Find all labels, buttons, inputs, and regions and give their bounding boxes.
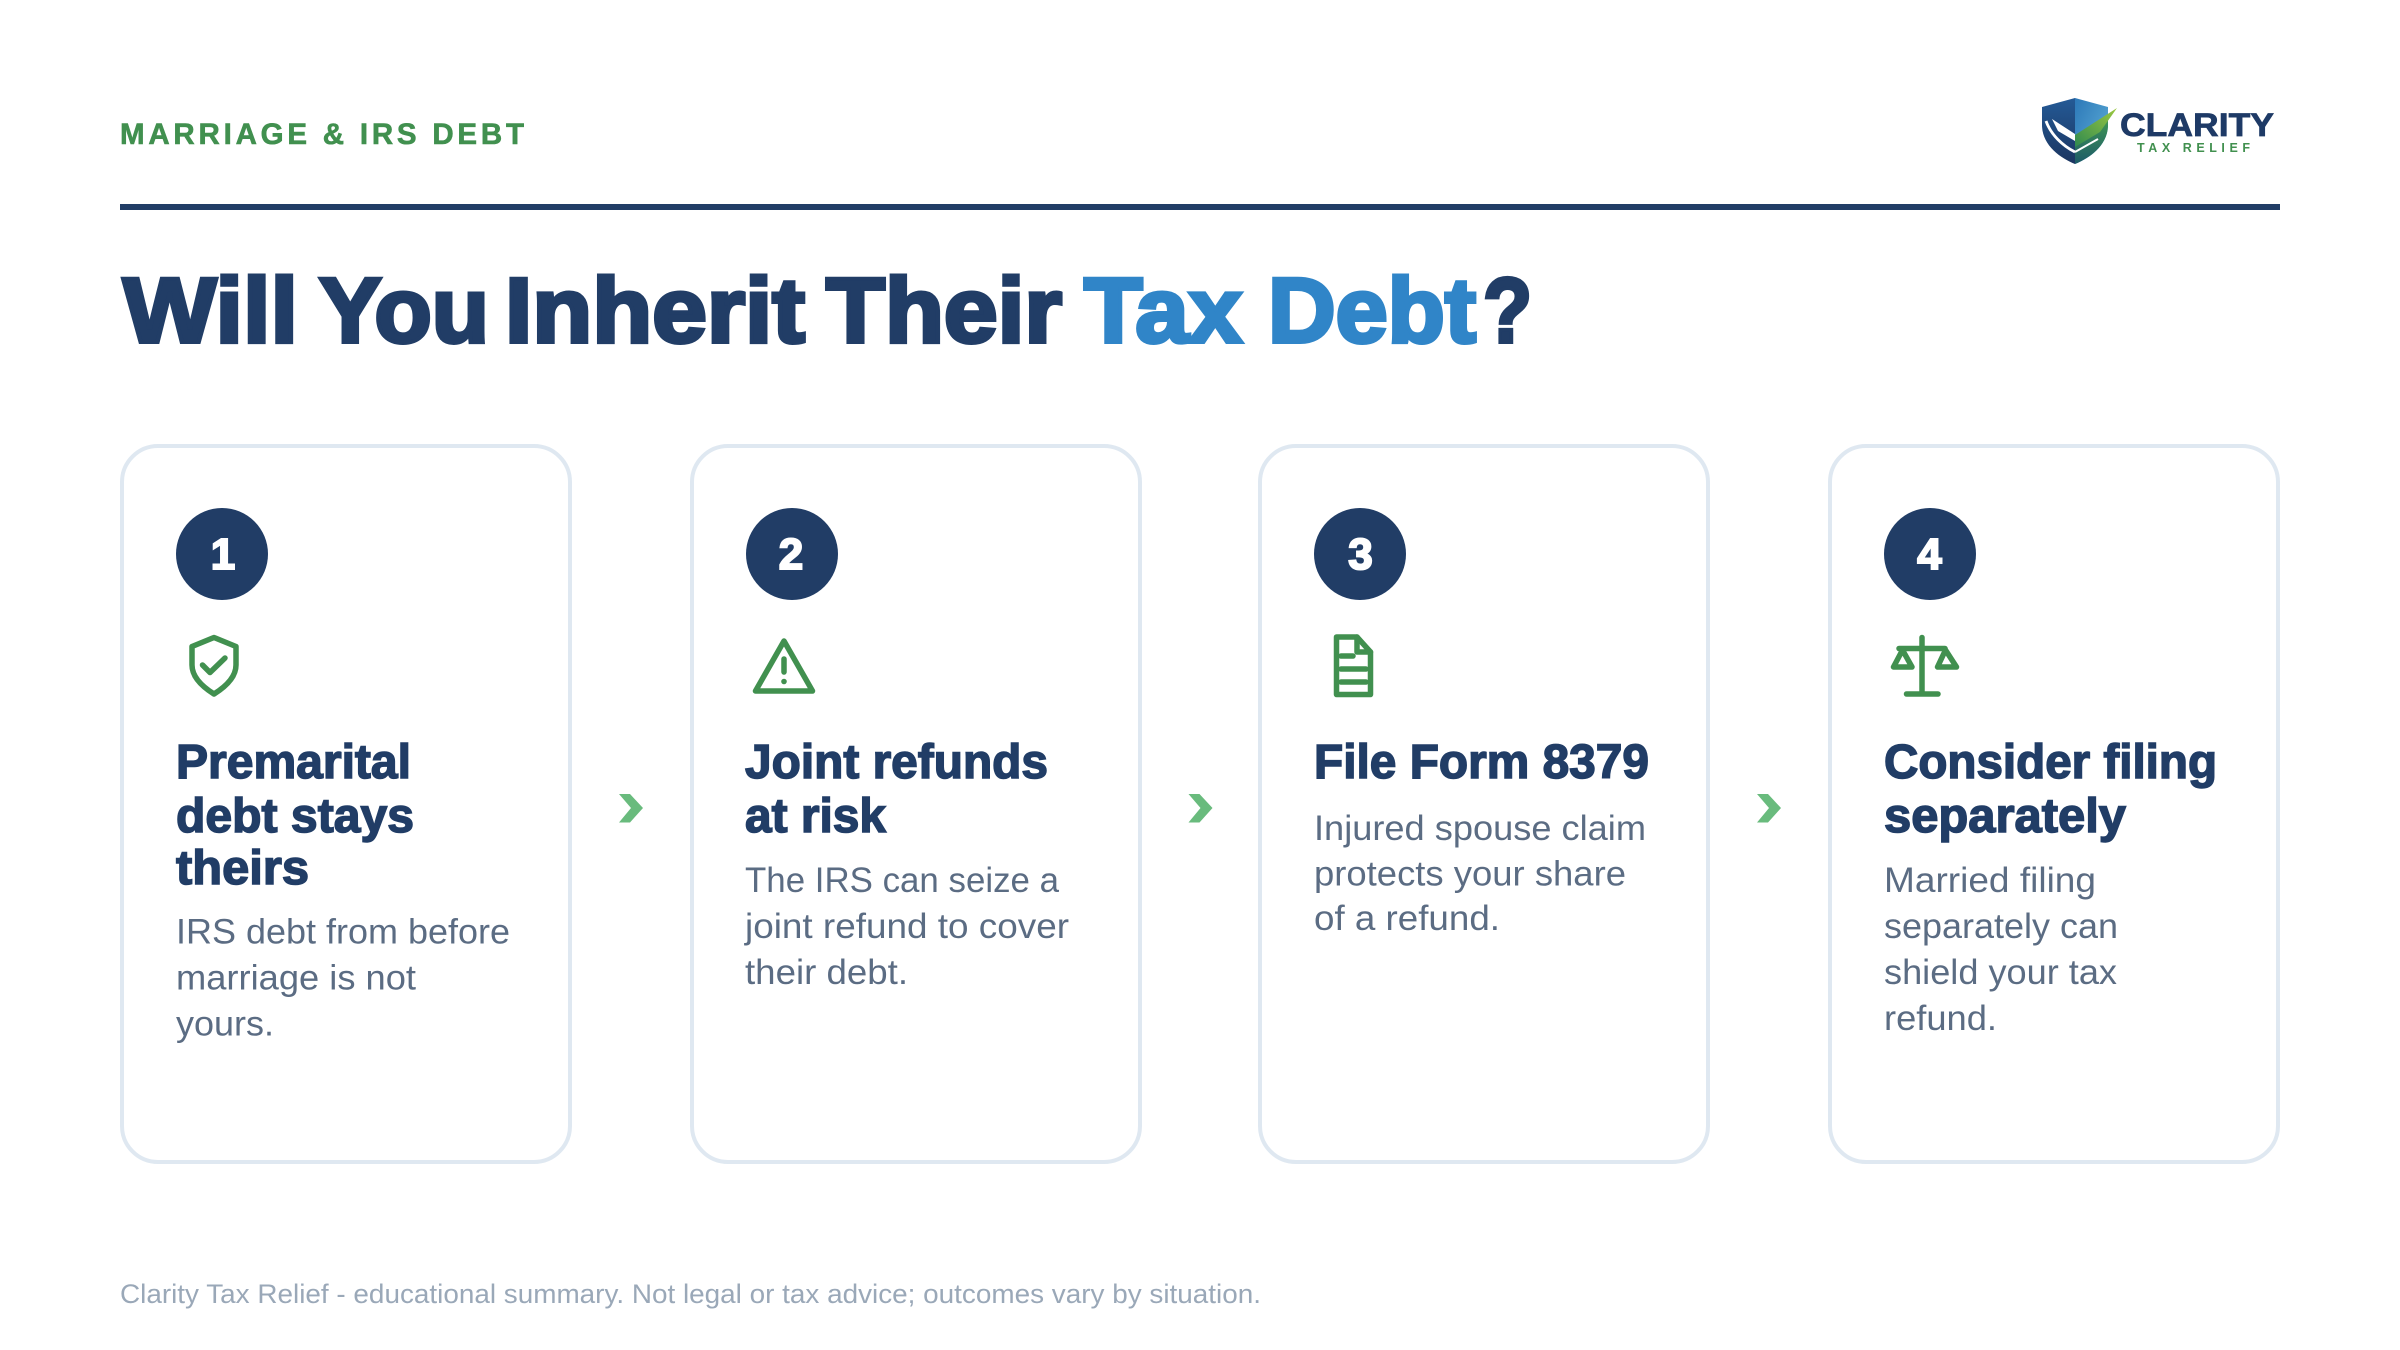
panel: step 2 xyxy=(692,446,1140,1162)
title: Debt xyxy=(1268,260,1476,362)
logo shield mark xyxy=(2042,98,2117,164)
icon: balance scales xyxy=(1894,638,1956,694)
panel: step 3 xyxy=(1260,446,1708,1162)
panel: step 4 xyxy=(1830,446,2278,1162)
panel: step 1 xyxy=(122,446,570,1162)
heading: Premarital xyxy=(176,736,411,789)
title: Their xyxy=(826,260,1062,362)
header rule xyxy=(120,204,2280,210)
logo: Clarity Tax Relief xyxy=(2042,98,2274,164)
body text: separately can xyxy=(1884,907,2118,946)
body text: IRS debt from before xyxy=(176,912,510,952)
heading: Consider filing xyxy=(1884,736,2217,789)
title: Will xyxy=(123,260,298,362)
heading: separately xyxy=(1884,790,2126,843)
heading: File Form 8379 xyxy=(1314,736,1649,789)
body text: yours. xyxy=(176,1004,274,1044)
body text: of a refund. xyxy=(1314,899,1500,938)
number badge 2 xyxy=(746,508,838,600)
card outline xyxy=(122,446,570,1162)
body text: Injured spouse claim xyxy=(1314,809,1646,848)
body text: their debt. xyxy=(745,953,908,992)
body text: Married filing xyxy=(1884,861,2096,900)
footer disclaimer: Clarity Tax Relief - educational summary. Not legal or tax advice; outcomes vary by situation. xyxy=(120,1279,1261,1309)
heading: at risk xyxy=(745,790,886,843)
number badge 1: 1 xyxy=(211,530,235,579)
number badge 4: 4 xyxy=(1917,530,1942,579)
heading: debt stays xyxy=(176,790,414,843)
body text: protects your share xyxy=(1314,854,1626,894)
body text: shield your tax xyxy=(1884,953,2118,992)
logo wordmark: CLARITY xyxy=(2120,107,2274,143)
title: You xyxy=(319,260,489,362)
heading: theirs xyxy=(176,842,309,895)
logo tagline: TAX RELIEF xyxy=(2137,141,2250,155)
card outline xyxy=(1830,446,2278,1162)
heading: Joint refunds xyxy=(745,736,1048,789)
card outline xyxy=(1260,446,1708,1162)
card outline xyxy=(692,446,1140,1162)
body text: The IRS can seize a xyxy=(745,861,1060,900)
icon: warning triangle xyxy=(756,641,812,691)
number badge 1 xyxy=(176,508,268,600)
body text: joint refund to cover xyxy=(744,907,1069,946)
number badge 3 xyxy=(1314,508,1406,600)
title: Inherit xyxy=(505,260,805,362)
number badge 2: 2 xyxy=(779,530,803,579)
body text: marriage is not xyxy=(176,958,416,998)
eyebrow label: MARRIAGE & IRS DEBT xyxy=(120,118,524,151)
icon: document xyxy=(1336,637,1370,694)
title: Tax xyxy=(1084,260,1242,362)
number badge 3: 3 xyxy=(1348,530,1373,579)
arrow 3 xyxy=(1757,794,1781,822)
body text: refund. xyxy=(1884,999,1997,1038)
number badge 4 xyxy=(1884,508,1976,600)
arrow 2 xyxy=(1188,794,1212,822)
arrow 1 xyxy=(619,794,643,822)
title: ? xyxy=(1483,260,1532,362)
icon: shield with check xyxy=(192,638,236,694)
